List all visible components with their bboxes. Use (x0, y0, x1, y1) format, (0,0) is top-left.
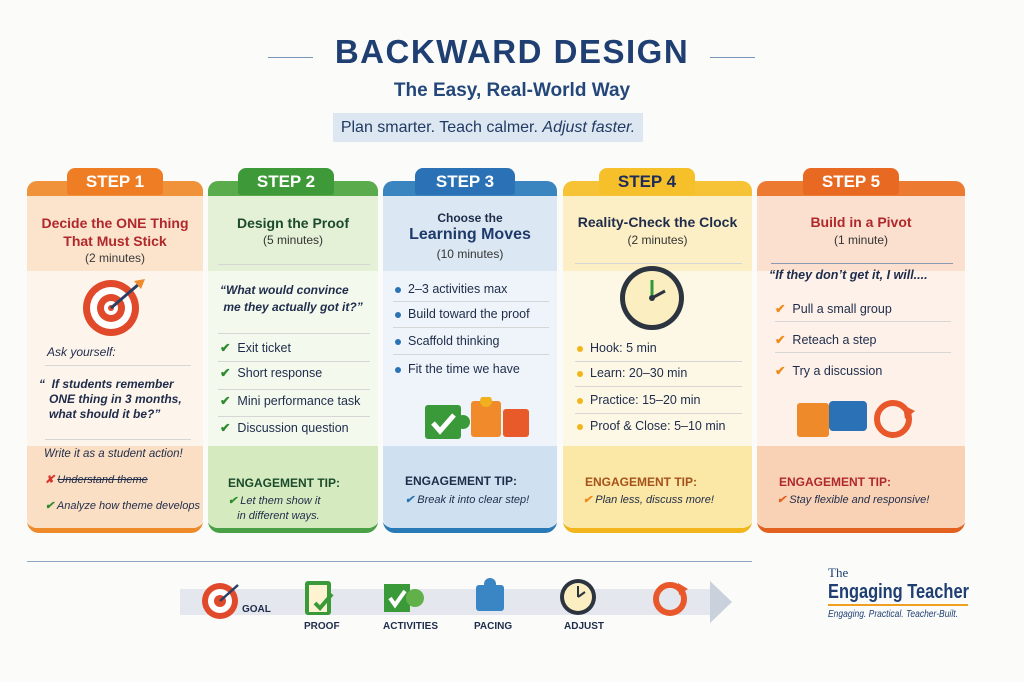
panel: step 3: Learning Moves (409, 226, 531, 243)
panel: step 5: ✔ Reteach a step (775, 333, 877, 347)
panel: step 2: in different ways. (237, 510, 320, 522)
panel: step 1: ✔ Analyze how theme develops (45, 500, 200, 512)
panel: step 3: Scaffold thinking (408, 334, 500, 348)
tab (803, 168, 899, 195)
engagement tip: ENGAGEMENT TIP: (228, 476, 340, 490)
process timeline: PACING (474, 621, 512, 632)
panel: step 5 (757, 181, 965, 533)
quote (39, 377, 182, 421)
quote: “If they don’t get it, I will.... (769, 268, 928, 282)
icon: puzzle pieces (425, 397, 529, 439)
list: Hook: 5 min (590, 341, 657, 355)
engagement tip: ENGAGEMENT TIP: (779, 475, 891, 489)
panel: step 2 (208, 181, 378, 533)
tab: STEP 4 (618, 172, 676, 191)
list: ✘ Understand theme (45, 474, 148, 486)
panel: step 2: ✔ Let them show it (228, 495, 320, 507)
logo: Engaging Teacher (828, 581, 969, 603)
tab (599, 168, 695, 195)
tab (238, 168, 334, 195)
panel: step 5: ✔ Try a discussion (775, 364, 882, 378)
heading (41, 215, 188, 249)
logo: The (828, 565, 848, 580)
engagement tip: ENGAGEMENT TIP: (585, 475, 697, 489)
panel: step 1: (2 minutes) (85, 251, 145, 265)
quote: “What would convince (220, 283, 349, 297)
title: BACKWARD DESIGN (335, 33, 689, 70)
panel: step 4: Learn: 20–30 min (590, 366, 687, 380)
icon: target (83, 279, 145, 336)
icon: pacing (476, 578, 504, 611)
panel: step 2: ✔ Short response (220, 366, 322, 380)
quote: ONE thing in 3 months, (49, 392, 182, 406)
checklist: ✔ Exit ticket (220, 341, 291, 355)
panel: step 3: Fit the time we have (408, 362, 520, 376)
icon: proof (305, 581, 334, 615)
tab: STEP 2 (257, 172, 315, 191)
quote: what should it be?” (49, 407, 160, 421)
heading: Choose the (437, 211, 503, 225)
panel: step 5: ✔ Stay flexible and responsive! (777, 494, 929, 506)
student action: Write it as a student action! (44, 448, 183, 460)
process timeline (180, 578, 732, 632)
tab: STEP 3 (436, 172, 494, 191)
panel: step 4: ✔ Plan less, discuss more! (583, 494, 714, 506)
logo (828, 565, 969, 620)
heading: Build in a Pivot (810, 214, 912, 230)
engagement tip: ENGAGEMENT TIP: (405, 474, 517, 488)
panel: step 4 (563, 181, 752, 533)
icon: activities (384, 584, 424, 612)
tab (415, 168, 515, 195)
process timeline: ADJUST (564, 621, 604, 632)
panel: step 2: ✔ Discussion question (220, 421, 349, 435)
icon: goal (202, 583, 239, 619)
subtitle: The Easy, Real-World Way (394, 80, 630, 101)
heading: Decide the ONE Thing (41, 215, 188, 231)
ask yourself: Ask yourself: (47, 345, 116, 359)
quote (220, 283, 363, 314)
icon: adjust clock (560, 579, 596, 615)
panel: step 3: (10 minutes) (437, 247, 503, 261)
icon: cycle (653, 582, 688, 616)
panel: step 4: Proof & Close: 5–10 min (590, 419, 726, 433)
tagline banner (333, 113, 643, 142)
panel: step 3 (383, 181, 557, 533)
panel: step 1 (27, 181, 203, 533)
panel: step 5: (1 minute) (834, 233, 888, 247)
panel: step 2: (5 minutes) (263, 233, 323, 247)
checklist: ✔ Pull a small group (775, 302, 892, 316)
tab (67, 168, 163, 195)
tab: STEP 5 (822, 172, 880, 191)
process timeline: GOAL (242, 604, 271, 615)
icon: puzzle and cycle (797, 400, 915, 438)
heading: Design the Proof (237, 215, 349, 231)
process timeline: PROOF (304, 621, 340, 632)
panel: step 3: Build toward the proof (408, 307, 530, 321)
list: 2–3 activities max (408, 282, 507, 296)
panel: step 2: ✔ Mini performance task (220, 394, 360, 408)
quote: me they actually got it?” (223, 300, 363, 314)
tagline banner: Plan smarter. Teach calmer. Adjust faster. (341, 119, 635, 136)
process timeline: ACTIVITIES (383, 621, 438, 632)
panel: step 4: (2 minutes) (627, 233, 688, 247)
logo: Engaging. Practical. Teacher-Built. (828, 609, 958, 620)
heading: Reality-Check the Clock (578, 214, 737, 230)
heading: That Must Stick (63, 233, 167, 249)
panel: step 4: Practice: 15–20 min (590, 393, 700, 407)
tab: STEP 1 (86, 172, 144, 191)
panel: step 3: ✔ Break it into clear step! (405, 494, 529, 506)
icon: clock (620, 266, 684, 330)
quote: “ If students remember (39, 377, 174, 391)
